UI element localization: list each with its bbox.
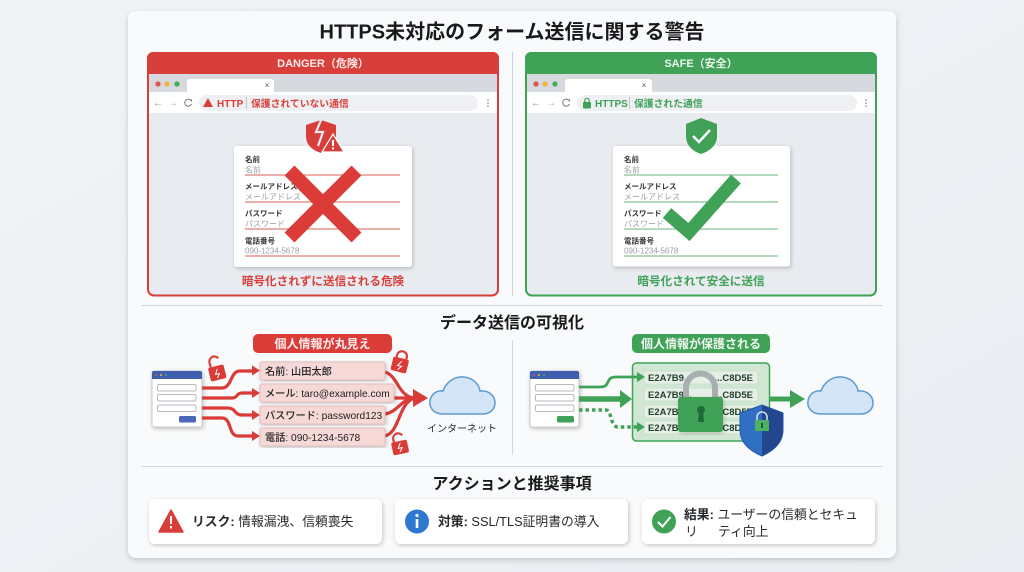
red arrows to data rows	[202, 366, 428, 441]
icon: check circle	[652, 510, 676, 534]
icon: browser form	[152, 371, 202, 427]
encrypted data box: ...C8D5E	[714, 423, 753, 434]
plaintext data rows	[260, 362, 394, 446]
panel: protected data flow	[530, 334, 873, 456]
danger header	[147, 52, 499, 74]
safe address bar text	[583, 97, 703, 110]
form fields: 名前	[245, 154, 260, 164]
form fields: パスワード	[245, 220, 285, 228]
danger address bar text: 保護されていない通信	[251, 97, 349, 110]
form fields: 090-1234-5678	[624, 246, 679, 256]
form fields: メールアドレス	[245, 192, 301, 202]
safe browser chrome: →	[546, 98, 556, 109]
panel: danger	[147, 52, 499, 296]
result text: ティ向上	[718, 524, 769, 539]
form fields: 名前	[624, 154, 639, 164]
encrypted data box: ...C8D5E	[714, 407, 753, 418]
danger browser chrome: ×	[265, 81, 270, 90]
icon: green padlock	[678, 374, 723, 432]
form fields: メールアドレス	[624, 182, 676, 191]
icon: check shield	[686, 118, 717, 154]
danger header: DANGER（危険）	[277, 56, 369, 70]
card: risk	[149, 499, 382, 544]
form fields: パスワード	[624, 209, 662, 218]
danger address bar text: HTTP	[217, 99, 243, 110]
risk text: リスク: 情報漏洩、信頼喪失	[192, 514, 354, 529]
safe address bar text: 保護された通信	[634, 97, 703, 110]
danger address bar text	[203, 97, 349, 110]
safe browser chrome: ←	[531, 98, 541, 109]
encrypted data box	[632, 363, 770, 441]
form fields	[624, 154, 778, 256]
form fields: パスワード	[624, 220, 664, 228]
danger browser chrome: ←	[153, 98, 163, 109]
safe caption: 暗号化されて安全に送信	[637, 274, 765, 288]
icon: red cross	[290, 170, 356, 238]
heading: actions: アクションと推奨事項	[432, 474, 592, 493]
form fields: 名前	[624, 164, 640, 174]
encrypted data box: E2A7B9...	[648, 423, 692, 434]
safe header	[525, 52, 877, 74]
form fields: 090-1234-5678	[245, 246, 300, 256]
danger caption: 暗号化されずに送信される危険	[242, 274, 405, 288]
form fields: メールアドレス	[245, 182, 298, 191]
plaintext data rows: パスワード: password123	[265, 410, 383, 422]
icon: destination cloud	[808, 377, 873, 414]
title: HTTPS未対応のフォーム送信に関する警告	[320, 20, 704, 44]
protected pill: 個人情報が保護される	[641, 336, 761, 351]
safe browser chrome	[527, 74, 875, 113]
icon: internet cloud	[430, 377, 495, 414]
encrypted data box: E2A7B9...	[648, 373, 692, 384]
plaintext data rows: メール: taro@example.com	[265, 389, 390, 400]
icon: browser form	[530, 371, 579, 427]
countermeasure text: 対策: SSL/TLS証明書の導入	[438, 514, 600, 529]
icon: blue security shield	[740, 405, 783, 456]
protected pill	[632, 334, 770, 353]
plaintext data rows: 電話: 090-1234-5678	[265, 432, 360, 444]
danger browser chrome: →	[168, 98, 178, 109]
icon: warning triangle	[159, 510, 183, 532]
green arrows to encrypted box	[579, 372, 805, 432]
heading: data visualization: データ送信の可視化	[440, 313, 584, 332]
safe header: SAFE（安全）	[664, 56, 738, 70]
panel: exposed data flow	[152, 334, 497, 456]
card: countermeasure	[395, 499, 628, 544]
result text: リ	[685, 524, 698, 539]
encrypted data box: ...C8D5E	[714, 373, 753, 384]
encrypted data box: E2A7B9...	[648, 390, 692, 401]
icon: open lock top right	[390, 349, 411, 374]
card: result	[642, 499, 875, 544]
form fields: パスワード	[245, 209, 282, 218]
safe form card	[613, 146, 790, 266]
exposed pill: 個人情報が丸見え	[274, 336, 371, 351]
result text	[684, 507, 858, 539]
safe browser chrome: ×	[642, 81, 647, 90]
main card	[128, 11, 896, 558]
danger browser chrome	[149, 74, 497, 113]
icon: open lock left	[205, 355, 227, 382]
encrypted data box: ...C8D5E	[714, 390, 753, 401]
panel: safe	[525, 52, 877, 296]
icon: info circle	[405, 510, 429, 534]
form fields	[245, 154, 400, 256]
form fields: 電話番号	[245, 236, 275, 246]
result text: 結果: ユーザーの信頼とセキュ	[684, 507, 858, 522]
form fields: 名前	[245, 164, 261, 174]
encrypted data box: E2A7B9...	[648, 407, 692, 418]
icon: broken shield warning	[306, 118, 344, 153]
safe address bar text: HTTPS	[595, 99, 628, 110]
danger form card	[234, 146, 412, 267]
form fields: 電話番号	[624, 236, 654, 246]
plaintext data rows: 名前: 山田太郎	[265, 365, 332, 378]
icon: open lock bottom right	[389, 432, 409, 456]
icon: green check	[667, 179, 736, 232]
cloud label: インターネット	[427, 423, 497, 435]
exposed pill	[253, 334, 392, 353]
form fields: メールアドレス	[624, 192, 680, 202]
